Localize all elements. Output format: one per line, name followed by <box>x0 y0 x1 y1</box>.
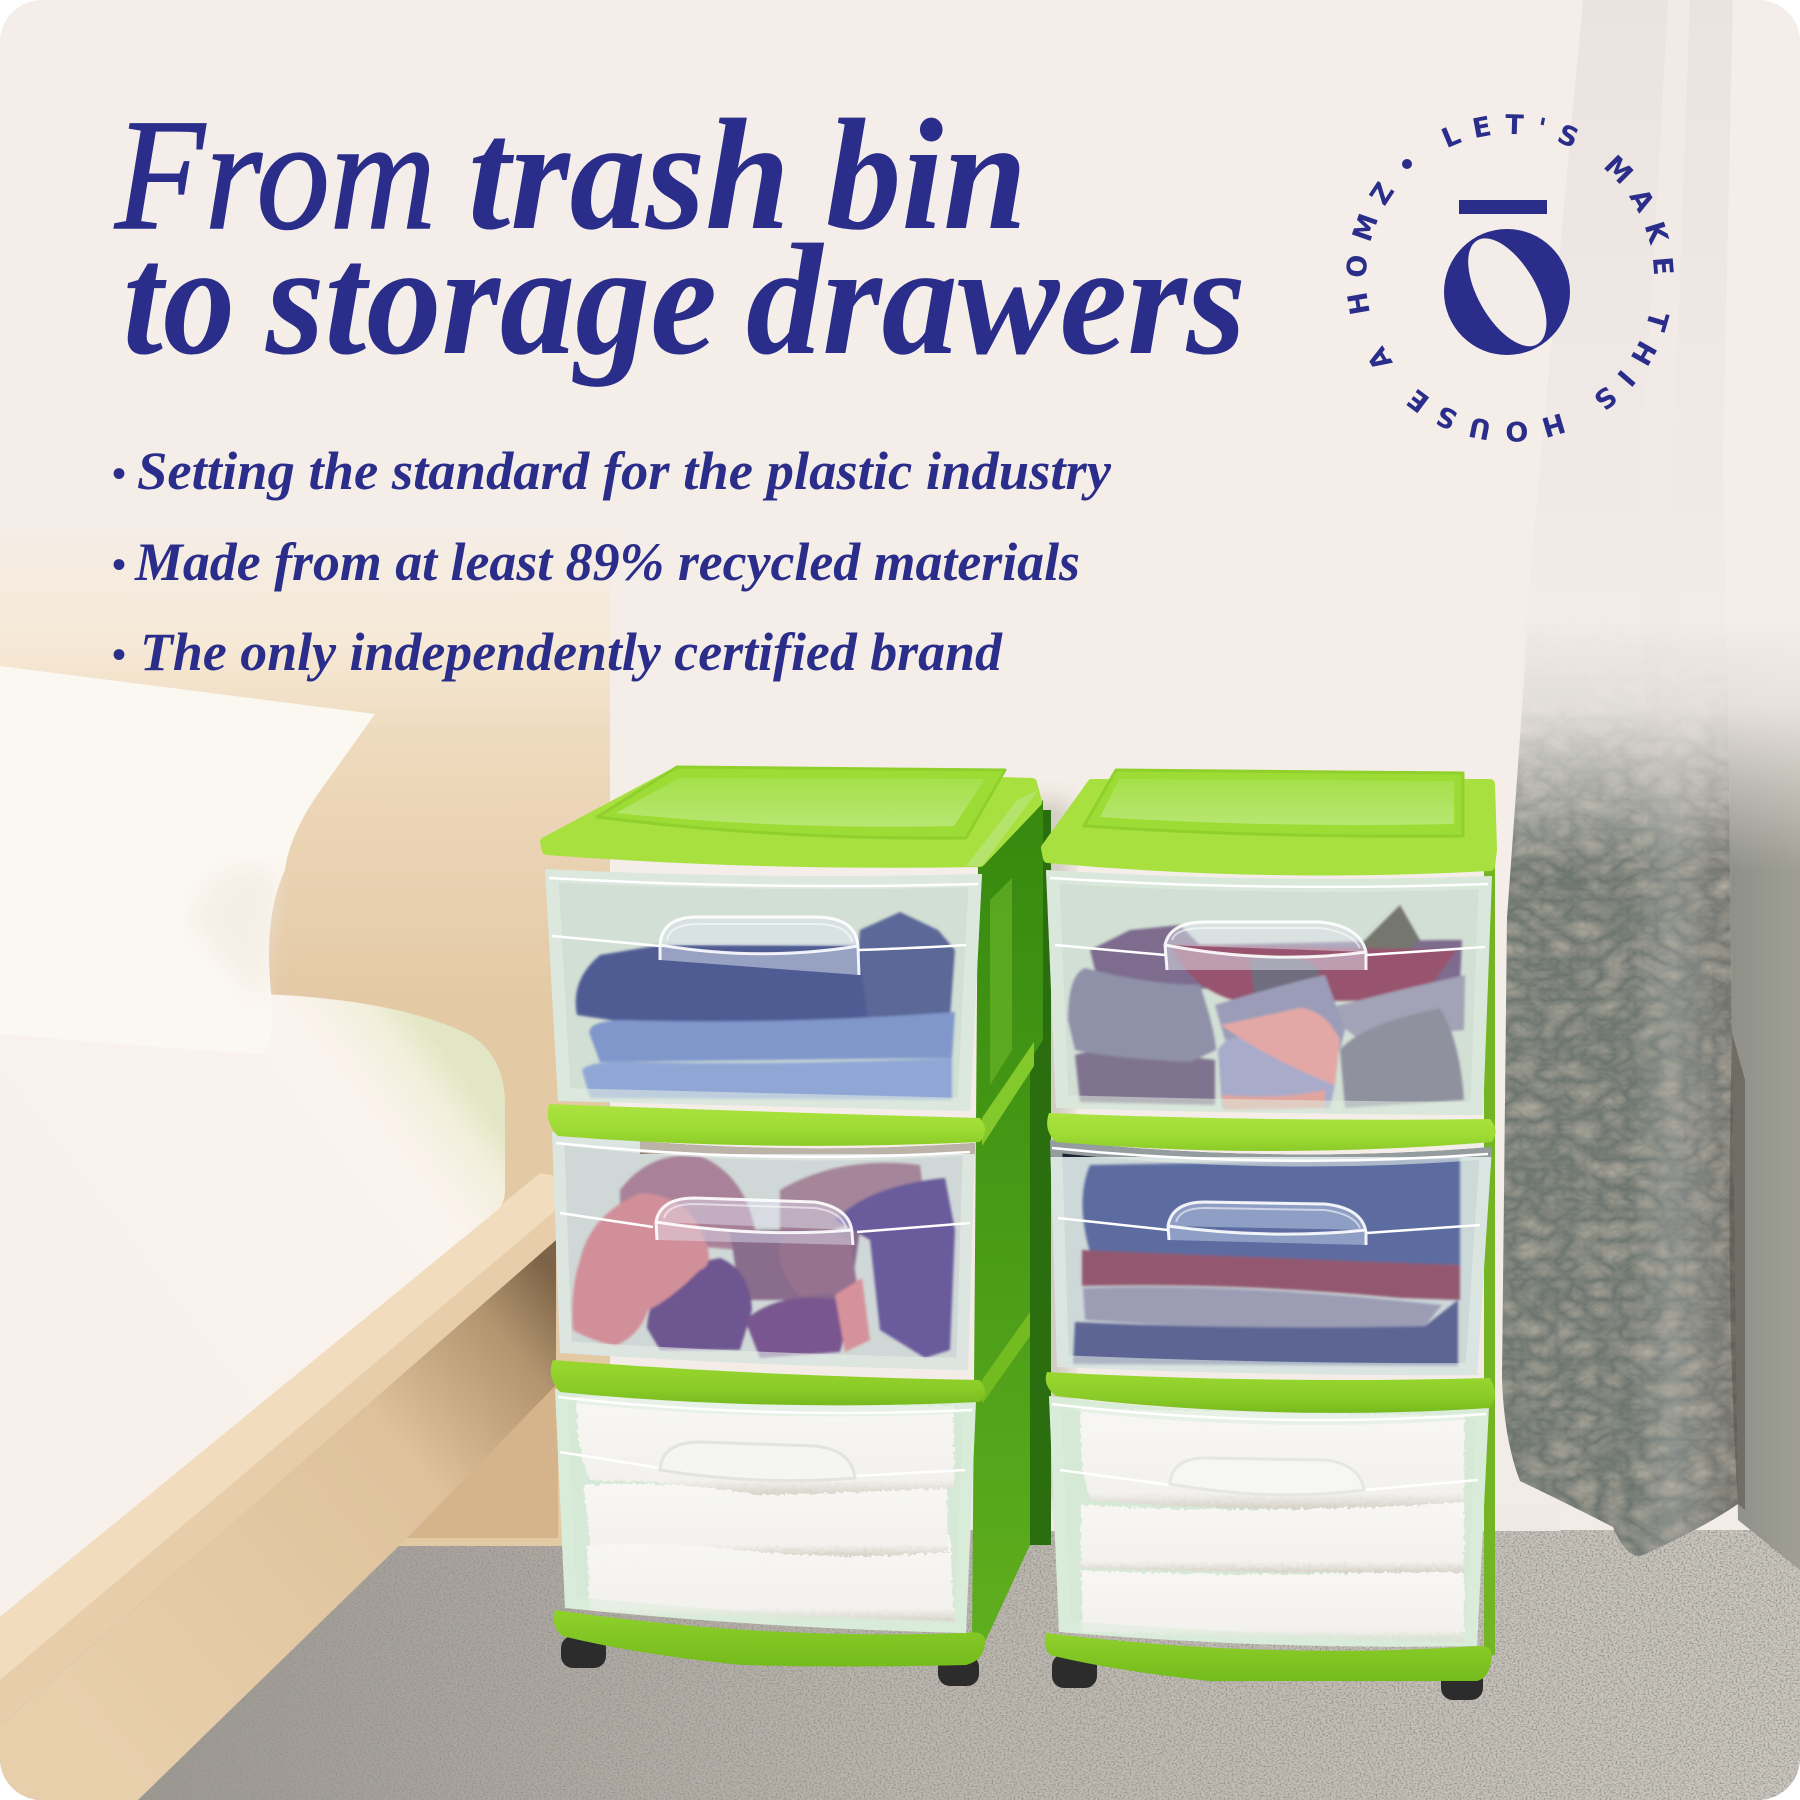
badge logo ring <box>1444 226 1570 359</box>
bed frame <box>0 1173 556 1800</box>
bullet one: • <box>112 451 126 496</box>
wall shadow behind drawers <box>1040 792 1077 1508</box>
wood below bed frame <box>407 1380 558 1538</box>
headboard <box>0 526 610 1546</box>
curtain patterned panels <box>1502 600 1800 1570</box>
band two right tower <box>1046 1372 1495 1413</box>
drawer three handle right tower <box>1170 1458 1364 1495</box>
tower side panel left <box>972 800 1043 1642</box>
drawer two handle right tower <box>1168 1202 1366 1245</box>
badge ring text: LET'S MAKE THIS HOUSE A HOMZ <box>1346 114 1674 442</box>
drawer one handle right tower <box>1165 922 1366 970</box>
title line two: drawers <box>746 212 1246 388</box>
wheels right tower <box>1052 1654 1483 1700</box>
lid right tower <box>1046 770 1492 870</box>
title words trash bin <box>468 87 1027 263</box>
title line two: to <box>123 212 235 388</box>
drawer tower left <box>545 767 1043 1686</box>
pillow <box>0 666 375 1054</box>
drawer one folded blue clothes <box>545 860 985 1115</box>
lid left tower <box>545 767 1038 866</box>
bullet three: The only independently certified brand <box>140 622 1003 682</box>
bullet three: • <box>112 632 126 677</box>
bullet list <box>112 441 1112 682</box>
drawer three handle left tower <box>660 1442 855 1481</box>
floor carpet <box>0 1530 1800 1800</box>
bullet two: • <box>112 542 126 587</box>
gap between towers <box>1030 810 1051 1545</box>
drawer one handle left tower <box>660 917 859 975</box>
wheels left tower <box>561 1636 979 1686</box>
title line two <box>123 212 1246 388</box>
circular badge <box>1346 114 1674 442</box>
title <box>114 87 1246 388</box>
title words trash bin: bin <box>826 87 1027 263</box>
title words trash bin: trash <box>468 87 790 263</box>
drawer one mixed clothes <box>1046 865 1496 1120</box>
tower side right <box>1484 860 1495 1655</box>
curtain upper pale folds <box>1567 0 1733 182</box>
bullet two: Made from at least 89% recycled materials <box>134 532 1080 592</box>
curtain <box>1502 0 1800 1570</box>
bullet one: Setting the standard for the plastic industry <box>137 441 1112 501</box>
frame ledge <box>0 1173 556 1726</box>
badge logo bar <box>1459 200 1547 214</box>
badge separator dot <box>1402 159 1412 169</box>
drawer three white towels <box>1046 1395 1496 1650</box>
mattress <box>0 994 505 1617</box>
drawer two folded stack <box>1046 1135 1496 1380</box>
band one left tower <box>548 1104 985 1146</box>
frame side board <box>0 1240 556 1800</box>
base left tower <box>554 1610 985 1666</box>
drawer two purple underwear <box>545 1125 980 1375</box>
title word From: From <box>114 87 436 263</box>
title line two: storage <box>265 212 717 388</box>
base right tower <box>1045 1633 1492 1681</box>
drawer two handle left tower <box>656 1198 853 1245</box>
wall skirting <box>1051 1530 1560 1531</box>
band one right tower <box>1047 1113 1496 1151</box>
drawer tower right <box>1045 770 1496 1700</box>
drawer three white towels <box>545 1385 985 1640</box>
band two left tower <box>551 1360 985 1405</box>
